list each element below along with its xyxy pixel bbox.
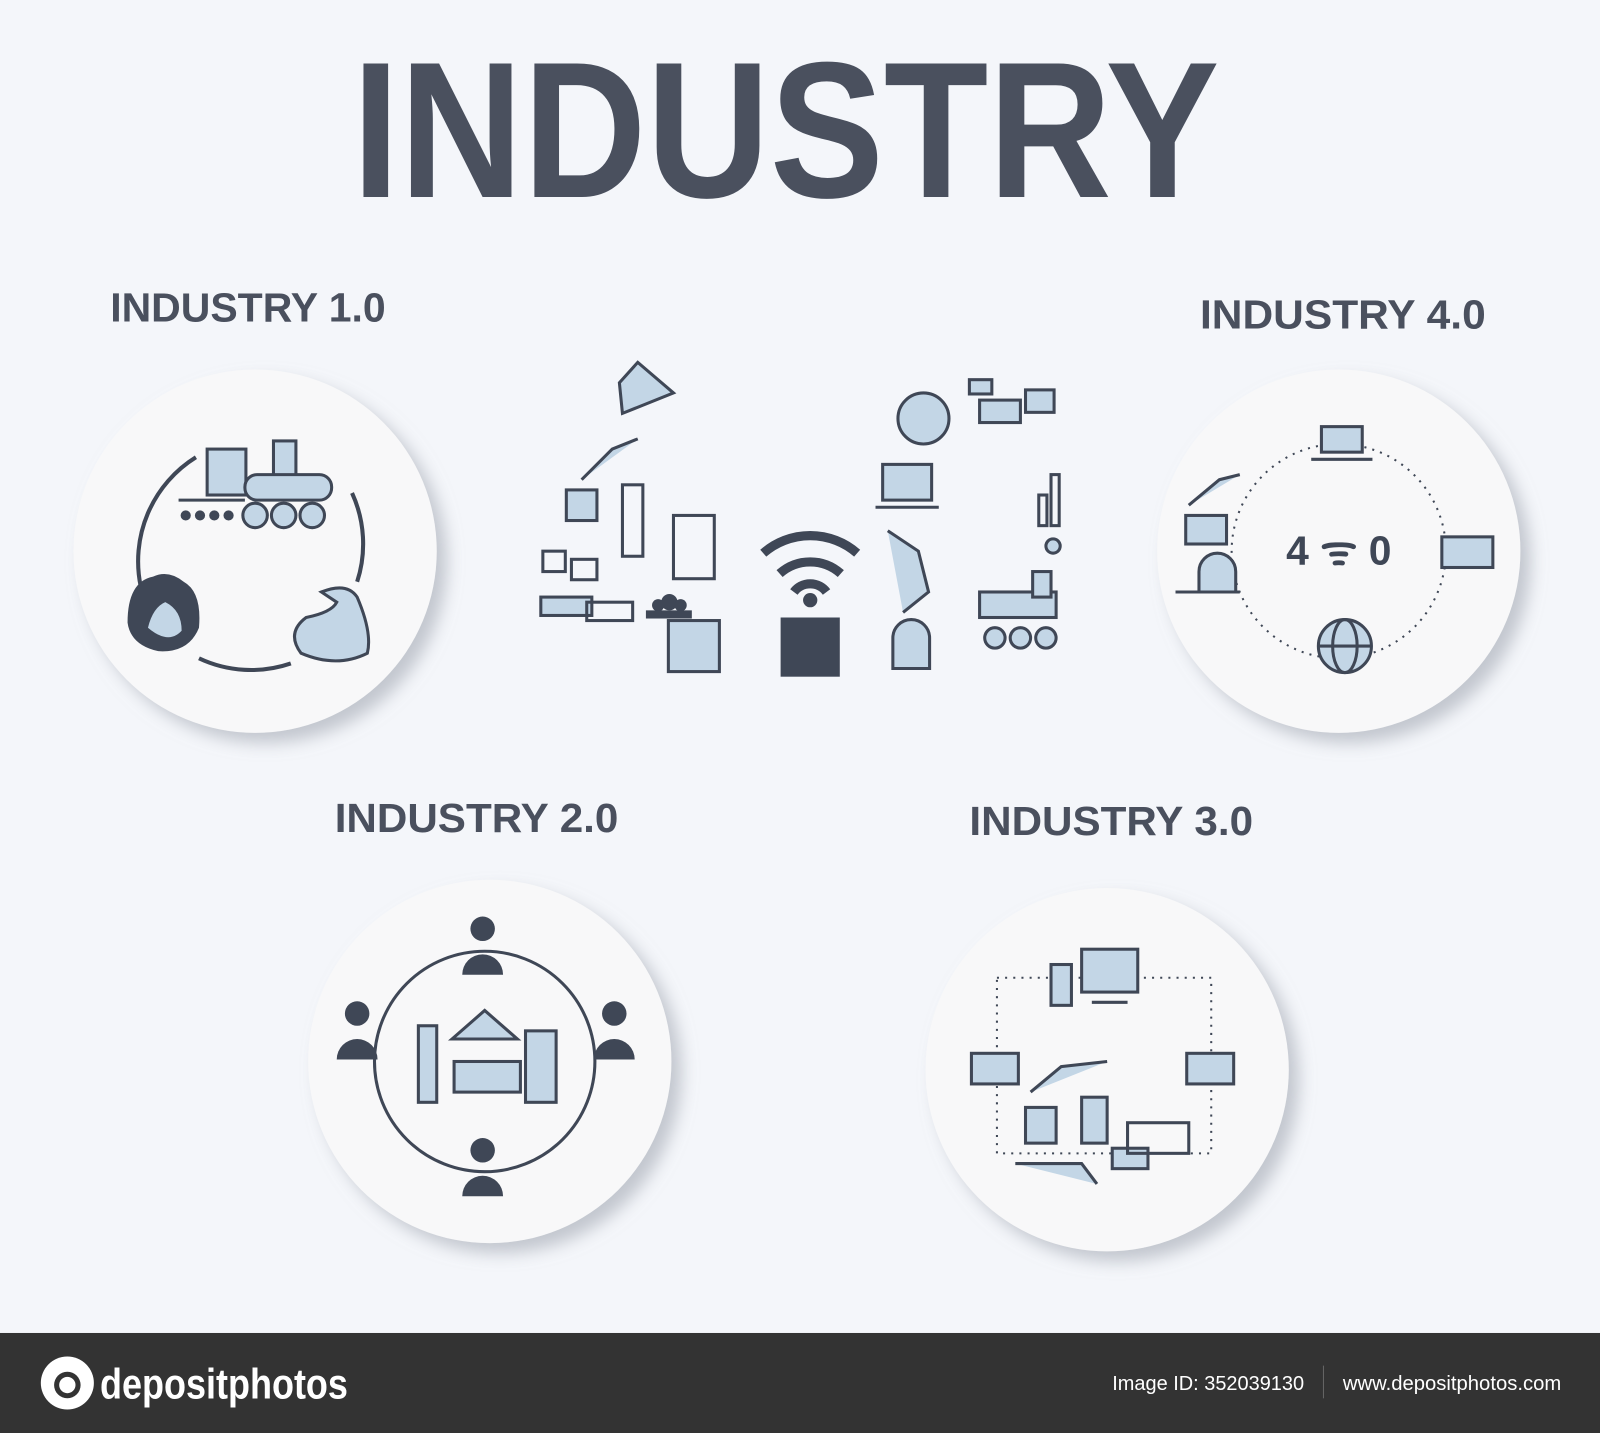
icon: muscle arm <box>294 588 369 661</box>
heading: industry 2.0: INDUSTRY 2.0 <box>335 795 618 841</box>
website: www.depositphotos.com <box>1342 1373 1561 1395</box>
panel: industry 2.0 <box>308 880 671 1243</box>
title: INDUSTRY <box>352 22 1219 239</box>
icon: globe <box>1318 620 1371 673</box>
icon: person top <box>462 917 503 975</box>
icon: person bottom <box>462 1138 503 1196</box>
footer bar <box>0 1333 1600 1433</box>
icon: laptop <box>1311 427 1372 459</box>
center: 4.0 icon composition <box>541 362 1060 677</box>
panel: industry 4.0 <box>1157 369 1520 733</box>
icon: factory <box>418 1010 556 1102</box>
text: 4 wifi 0: 4 ᯤ 0 <box>1286 527 1391 573</box>
icon: person right <box>594 1001 635 1059</box>
icon: chip right <box>1187 1053 1234 1084</box>
heading: industry 1.0: INDUSTRY 1.0 <box>110 285 386 331</box>
figure 4 <box>541 362 719 672</box>
heading: industry 4.0: INDUSTRY 4.0 <box>1200 292 1486 338</box>
icon: chip <box>1442 537 1493 567</box>
icon: computer <box>1051 949 1138 1005</box>
figure 0 <box>876 380 1060 669</box>
panel: industry 1.0 <box>73 369 437 733</box>
wifi <box>763 536 857 592</box>
heading: industry 3.0: INDUSTRY 3.0 <box>969 798 1253 844</box>
icon: robot and boxes <box>1015 1061 1189 1184</box>
icon: chip left <box>971 1053 1018 1084</box>
icon: robot arm <box>1176 475 1240 592</box>
image id: Image ID: 352039130 <box>1112 1373 1304 1395</box>
logo text: depositphotos <box>100 1360 348 1408</box>
icon: steam engine <box>179 441 332 528</box>
icon: fire <box>128 574 199 651</box>
panel: industry 3.0 <box>926 888 1289 1251</box>
icon: person left <box>337 1001 378 1059</box>
logo icon <box>41 1356 94 1410</box>
